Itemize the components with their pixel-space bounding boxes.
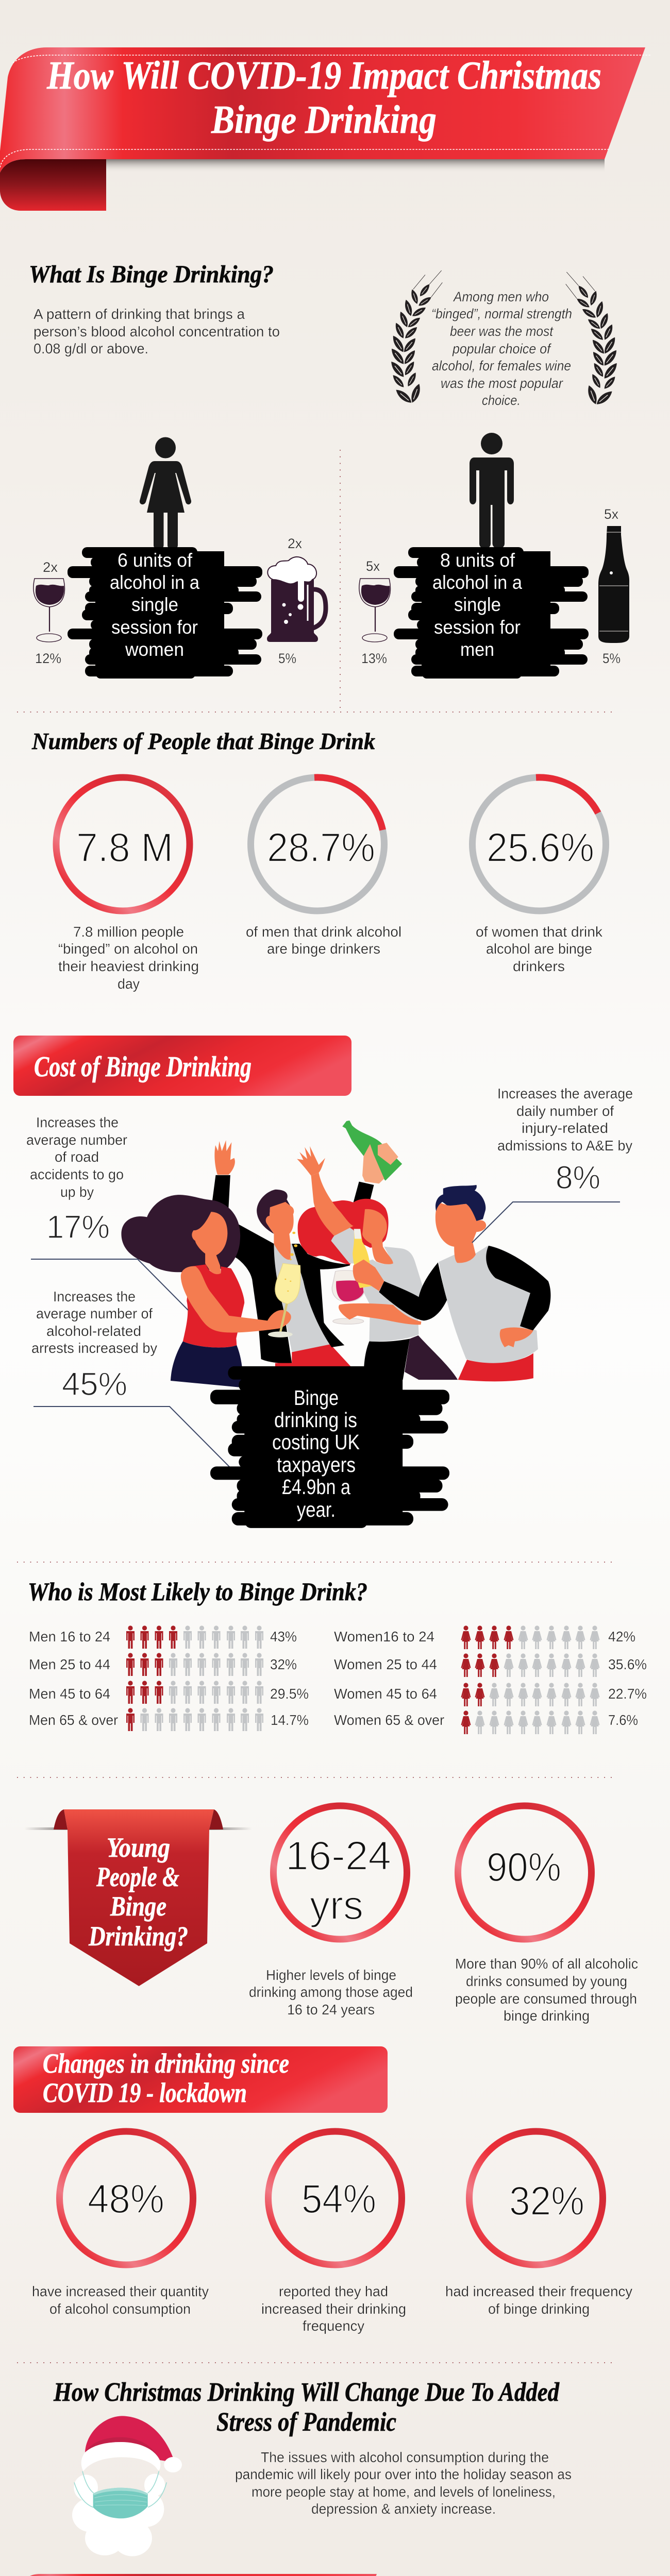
banner: changes in drinking: COVID 19 - lockdown (43, 2077, 247, 2108)
scribble label: cost to taxpayers (210, 1366, 449, 1528)
pictogram rows: men: 43% (270, 1629, 297, 1645)
caption: women: of women that drink (476, 924, 602, 940)
stat ring: 32%: 32% (509, 2178, 584, 2224)
scribble label: women units: session for (111, 617, 198, 638)
pictogram rows: men: Men 16 to 24 (29, 1629, 110, 1645)
stat ring: 16-24 yrs (273, 1806, 407, 1939)
caption: 7.8 million: their heaviest drinking (58, 958, 199, 974)
callout: admissions (497, 1086, 633, 1196)
caption: men: of men that drink alcohol (246, 924, 401, 940)
scribble label: cost to taxpayers: costing UK (272, 1430, 360, 1454)
scribble label: men units: men (460, 639, 494, 660)
pictogram rows: women: 35.6% (608, 1656, 647, 1672)
drink counts and shares: 2x (43, 560, 58, 575)
caption: more than 90%: drinks consumed by young (466, 1973, 627, 1989)
quote text: Among men who (453, 289, 549, 304)
hanging banner: young people: People & (96, 1861, 179, 1892)
scribble label: men units: single (454, 594, 501, 615)
definition text: A pattern of drinking that brings a (34, 306, 245, 322)
caption: more than 90%: binge drinking (504, 2008, 590, 2024)
callout: road accidents (26, 1114, 127, 1245)
hanging banner: young people: Binge (110, 1891, 166, 1922)
quote text: beer was the most (450, 324, 554, 339)
hanging banner: young people (24, 1809, 252, 1986)
caption: 7.8 million: 7.8 million people (73, 924, 184, 940)
caption: women: alcohol are binge (486, 941, 592, 957)
drink counts and shares: 5% (278, 651, 296, 666)
icon: wine glass women (34, 579, 64, 642)
caption: men: are binge drinkers (267, 941, 380, 957)
caption: quantity: have increased their quantity (32, 2283, 209, 2299)
scribble label: cost to taxpayers: £4.9bn a (282, 1475, 350, 1499)
callout: arrests: 45% (62, 1366, 127, 1402)
paragraph: pandemic stress: depression & anxiety increase. (311, 2501, 496, 2517)
icon: beer bottle (598, 526, 629, 643)
vertical divider (340, 450, 341, 708)
callout: arrests: arrests increased by (31, 1340, 157, 1356)
banner: cost of binge drinking (13, 1036, 351, 1096)
callout: admissions: daily number of (516, 1103, 614, 1119)
caption: binge frequency: had increased their frequency (445, 2283, 632, 2299)
drink counts and shares: 2x (288, 536, 302, 551)
caption: quantity: of alcohol consumption (49, 2301, 191, 2317)
scribble label: women units: single (131, 594, 178, 615)
scribble label: men units (394, 547, 589, 679)
callout: road accidents: accidents to go (30, 1166, 124, 1182)
stat ring: 90%: 90% (487, 1844, 561, 1890)
pictogram rows: women: Women 25 to 44 (334, 1656, 437, 1672)
pictogram rows: men (29, 1625, 309, 1731)
title ribbon: Binge Drinking (211, 97, 437, 142)
paragraph: pandemic stress: The issues with alcohol consumption during the (261, 2449, 549, 2465)
heading: how christmas drinking will change: Stress of Pandemic (216, 2408, 396, 2437)
caption: binge frequency: of binge drinking (488, 2301, 590, 2317)
scribble label: cost to taxpayers: drinking is (274, 1408, 357, 1432)
scribble label: women units: 6 units of (118, 550, 193, 571)
drink counts and shares (35, 506, 621, 666)
drink counts and shares: 5x (366, 558, 380, 574)
callout: admissions: 8% (556, 1160, 600, 1196)
callout: arrests (31, 1289, 157, 1402)
stat ring: 48%: 48% (88, 2176, 164, 2222)
scribble label: women units: alcohol in a (110, 572, 199, 593)
quote text: choice. (482, 393, 521, 408)
drink counts and shares: 13% (361, 651, 387, 666)
paragraph: pandemic stress (235, 2449, 572, 2517)
stat ring: 48% (60, 2131, 193, 2265)
callout: admissions: admissions to A&E by (497, 1138, 632, 1154)
caption: women (476, 924, 602, 974)
scribble label: men units: alcohol in a (432, 572, 522, 593)
caption: higher levels (249, 1967, 413, 2018)
definition text: 0.08 g/dl or above. (34, 341, 148, 357)
quote text: was the most popular (441, 376, 563, 391)
callout: road accidents: of road (55, 1149, 99, 1165)
scribble label: women units: women (125, 639, 184, 660)
banner: cost of binge drinking: Cost of Binge Drinking (34, 1051, 252, 1083)
caption: higher levels: drinking among those aged (249, 1984, 413, 2000)
drink counts and shares: 12% (35, 651, 61, 666)
pictogram rows: women (334, 1625, 647, 1734)
caption: frequency (261, 2283, 406, 2334)
wreath right (566, 272, 619, 407)
scribble label: men units: 8 units of (440, 550, 515, 571)
ribbon: first drink heading (14, 2574, 380, 2576)
hanging banner: young people: Young (107, 1832, 170, 1863)
callout: admissions: injury-related (522, 1120, 608, 1136)
pictogram rows: men: Men 65 & over (29, 1712, 118, 1728)
pictogram rows: men: 32% (270, 1656, 297, 1672)
wreath left (389, 270, 442, 405)
heading: who is most likely: Who is Most Likely to Binge Drink? (28, 1577, 367, 1606)
pictogram rows: women: 22.7% (608, 1686, 647, 1702)
quote text: “binged”, normal strength (431, 306, 572, 321)
caption: frequency: increased their drinking (261, 2301, 406, 2317)
stat ring: 16-24 yrs: yrs (310, 1882, 363, 1928)
drink counts and shares: 5% (602, 651, 621, 666)
pictogram rows: women: 7.6% (608, 1712, 638, 1728)
callout: road accidents: 17% (46, 1209, 110, 1245)
leader line: road accidents (31, 1259, 188, 1310)
scribble label: cost to taxpayers: year. (297, 1498, 336, 1521)
quote text: popular choice of (452, 341, 551, 357)
pictogram rows: women: Women16 to 24 (334, 1629, 434, 1645)
caption: more than 90% (455, 1956, 638, 2024)
scribble label: cost to taxpayers: Binge (294, 1386, 339, 1410)
paragraph: pandemic stress: more people stay at home, and levels of loneliness, (252, 2484, 556, 2500)
pictogram rows: men: Men 25 to 44 (29, 1656, 110, 1672)
caption: women: drinkers (513, 958, 565, 974)
stat ring: 54% (268, 2131, 402, 2265)
caption: frequency: frequency (303, 2318, 364, 2334)
stat ring: 16-24 yrs: 16-24 (286, 1833, 391, 1878)
heading: numbers of people: Numbers of People that Binge Drink (31, 728, 375, 754)
definition text: person’s blood alcohol concentration to (34, 324, 280, 340)
banner: changes in drinking (13, 2046, 388, 2113)
icon: woman figure (140, 437, 191, 550)
caption: quantity (32, 2283, 209, 2317)
caption: more than 90%: people are consumed through (455, 1991, 637, 2007)
banner: changes in drinking: Changes in drinking since (43, 2048, 289, 2079)
scribble label: men units: session for (434, 617, 521, 638)
icon: man figure (470, 433, 514, 549)
pictogram rows: women: 42% (608, 1629, 635, 1645)
stat ring: 28.7%: 28.7% (267, 824, 375, 870)
pictogram rows: men: Men 45 to 64 (29, 1686, 110, 1702)
stat ring: 25.6%: 25.6% (487, 824, 594, 870)
pictogram rows: women: Women 65 & over (334, 1712, 444, 1728)
scribble label: women units (68, 547, 262, 679)
icon: wine glass men (359, 579, 390, 642)
callout: admissions: Increases the average (497, 1086, 633, 1101)
definition text (34, 306, 280, 357)
callout: road accidents: up by (60, 1184, 94, 1200)
stat ring: 7.8 M (56, 777, 190, 911)
paragraph: pandemic stress: pandemic will likely pour over into the holiday season as (235, 2466, 572, 2482)
stat ring: 32% (469, 2131, 603, 2265)
icon: santa with mask (72, 2416, 182, 2556)
callout: arrests: Increases the (53, 1289, 136, 1304)
caption: binge frequency (445, 2283, 632, 2317)
caption: higher levels: 16 to 24 years (287, 2002, 375, 2018)
illustration: group of people drinking (121, 1121, 550, 1387)
callout: road accidents: average number (26, 1132, 127, 1148)
scribble label: cost to taxpayers: taxpayers (277, 1453, 356, 1477)
hanging banner: young people: Drinking? (88, 1921, 188, 1952)
quote text (431, 289, 572, 408)
heading: what is binge drinking: What Is Binge Drinking? (29, 261, 274, 288)
caption: 7.8 million: day (118, 976, 140, 992)
stat ring: 90% (458, 1806, 592, 1939)
pictogram rows: women: Women 45 to 64 (334, 1686, 437, 1702)
callout: arrests: alcohol-related (46, 1323, 141, 1339)
caption: men (246, 924, 401, 957)
caption: more than 90%: More than 90% of all alcoholic (455, 1956, 638, 1972)
stat ring: 28.7% (250, 777, 384, 911)
leader line: admissions (472, 1202, 620, 1243)
caption: 7.8 million: “binged” on alcohol on (58, 941, 198, 957)
callout: arrests: average number of (36, 1306, 153, 1321)
title ribbon (0, 47, 650, 211)
stat ring: 54%: 54% (301, 2176, 376, 2222)
drink counts and shares: 5x (604, 506, 618, 522)
heading: how christmas drinking will change: How Christmas Drinking Will Change Due To Added (53, 2378, 560, 2407)
stat ring: 25.6% (472, 777, 606, 911)
icon: beer mug (267, 557, 326, 642)
heading: how christmas drinking will change (53, 2378, 560, 2437)
caption: 7.8 million (58, 924, 199, 992)
pictogram rows: men: 14.7% (271, 1712, 309, 1728)
caption: frequency: reported they had (279, 2283, 388, 2299)
quote text: alcohol, for females wine (432, 358, 571, 374)
callout: road accidents: Increases the (36, 1114, 119, 1130)
pictogram rows: men: 29.5% (270, 1686, 309, 1702)
caption: higher levels: Higher levels of binge (266, 1967, 396, 1983)
stat ring: 7.8 M: 7.8 M (76, 824, 173, 870)
leader line: arrests (34, 1406, 234, 1471)
